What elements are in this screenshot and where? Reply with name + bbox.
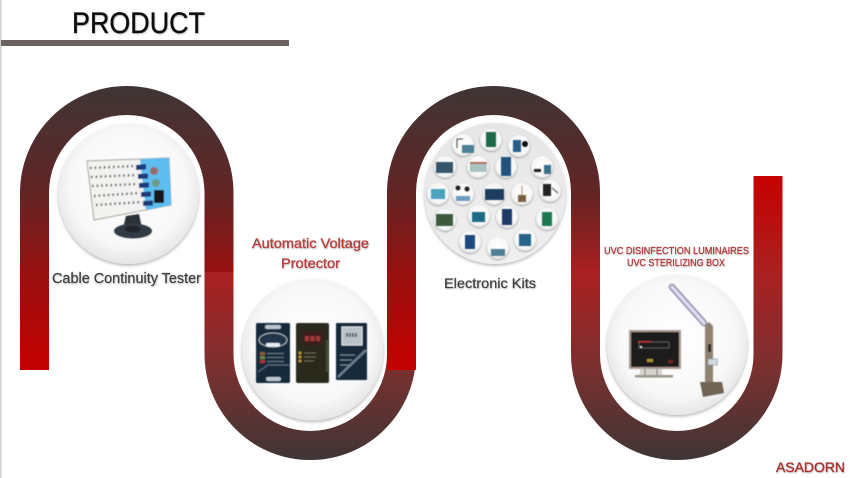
icon: sterilizing box — [630, 331, 680, 378]
product disc — [58, 124, 198, 264]
panel: automatic voltage protector — [242, 280, 383, 420]
title: PRODUCT — [72, 7, 205, 40]
title underline — [1, 40, 289, 46]
label: automatic voltage protector: Protector — [281, 255, 340, 271]
label: uvc products — [604, 246, 749, 269]
label: automatic voltage protector: Automatic Voltage — [252, 235, 369, 251]
ribbon: u-curve under uvc products — [586, 176, 768, 446]
label: cable continuity tester: Cable Continuity Tester — [52, 270, 201, 287]
product disc — [607, 275, 747, 415]
product disc — [242, 280, 383, 420]
panel: uvc products — [607, 275, 747, 415]
panel: electronic kits — [424, 123, 566, 264]
ribbon: arch over cable continuity tester — [34, 101, 219, 370]
icon: kit thumbnails — [427, 129, 561, 259]
label: automatic voltage protector — [252, 235, 369, 271]
icon: uvc luminaire — [672, 287, 724, 397]
brand name: ASADORN — [776, 459, 845, 475]
ribbon: u-curve under automatic voltage protector — [219, 272, 402, 446]
ribbon: arch over electronic kits — [402, 100, 586, 370]
icon: three protector units — [256, 323, 367, 383]
panel: cable continuity tester — [58, 124, 198, 264]
label: uvc products: UVC STERILIZING BOX — [627, 258, 725, 269]
icon: tester panel — [87, 158, 171, 238]
ribbon: seamless join between arch and u-curve — [571, 200, 600, 272]
label: electronic kits: Electronic Kits — [444, 275, 536, 291]
label: uvc products: UVC DISINFECTION LUMINAIRES — [604, 246, 749, 257]
product disc — [424, 123, 566, 264]
